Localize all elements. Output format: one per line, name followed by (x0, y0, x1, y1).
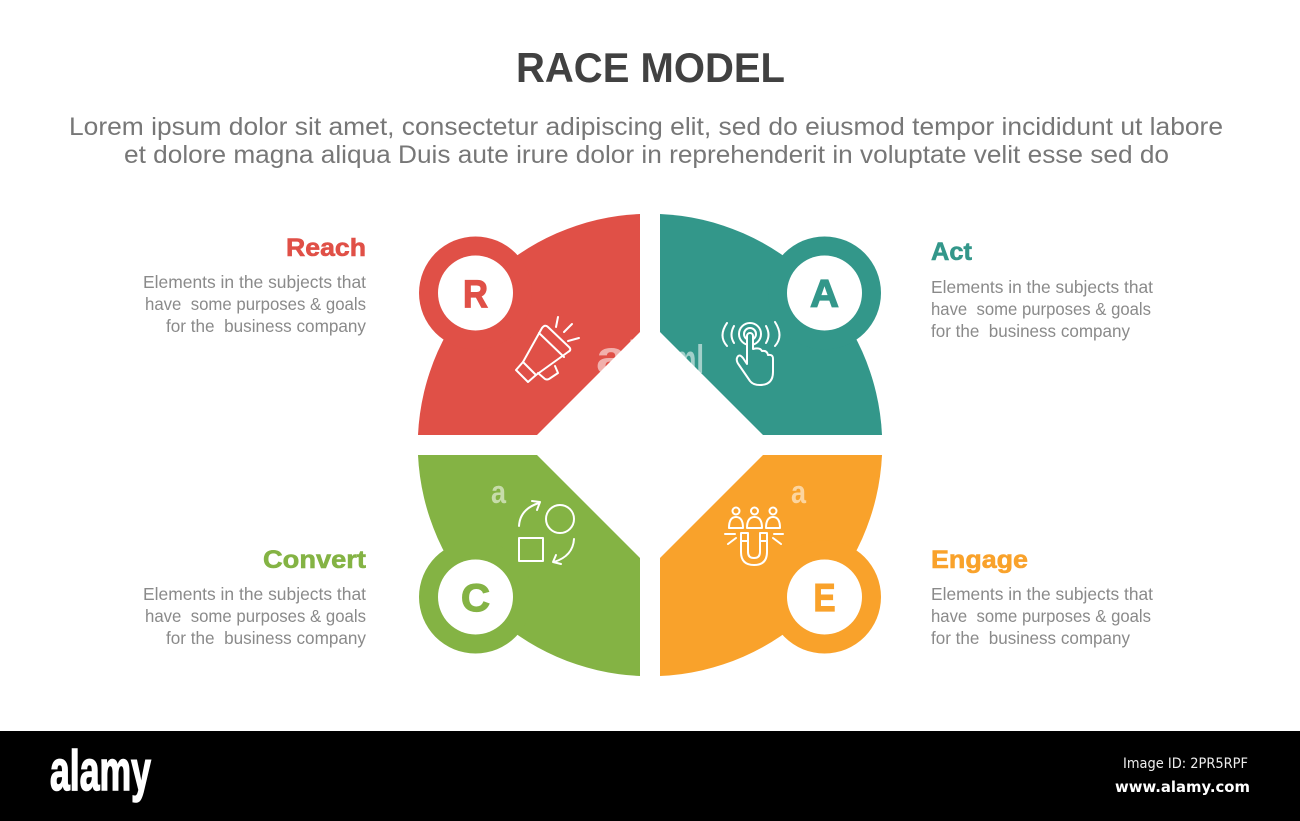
label: convert: have some purposes & goals (145, 606, 366, 626)
label: act: for the business company (931, 321, 1130, 341)
label: engage (931, 546, 1153, 648)
label: act: Elements in the subjects that (931, 277, 1153, 297)
panel: convert segment: C (461, 577, 490, 620)
label: engage: Elements in the subjects that (931, 584, 1153, 604)
label: act (931, 238, 1153, 341)
footer bar (0, 731, 1300, 821)
label: convert (143, 546, 367, 648)
label: convert: for the business company (166, 628, 366, 648)
label: act: Act (931, 238, 973, 266)
watermark fragments: al (596, 331, 642, 383)
panel: engage segment: E (814, 577, 836, 620)
panel: reach segment: R (463, 273, 488, 316)
icon: magnet attracting people (725, 508, 783, 565)
panel: reach segment (418, 214, 640, 435)
label: reach: for the business company (166, 316, 366, 336)
watermark fragments: a (491, 474, 506, 510)
label: convert: Convert (263, 546, 367, 574)
panel: act segment (660, 214, 882, 435)
icon: megaphone (516, 317, 579, 382)
label: reach (143, 234, 366, 336)
label: engage: Engage (931, 546, 1028, 574)
label: reach: have some purposes & goals (145, 294, 366, 314)
label: engage: for the business company (931, 628, 1130, 648)
subtitle text block: Lorem ipsum dolor sit amet, consectetur adipiscing elit, sed do eiusmod tempor incididunt ut labore (69, 113, 1223, 141)
panel: engage segment (660, 455, 882, 676)
label: act: have some purposes & goals (931, 299, 1151, 319)
subtitle text block (69, 113, 1223, 169)
label: engage: have some purposes & goals (931, 606, 1151, 626)
subtitle text block: et dolore magna aliqua Duis aute irure dolor in reprehenderit in voluptate velit esse sed do (124, 141, 1169, 169)
footer image id: Image ID: 2PR5RPF (1123, 756, 1248, 772)
title: RACE MODEL (516, 44, 785, 91)
panel: convert segment (418, 455, 640, 676)
watermark fragments: ml (672, 338, 704, 382)
label: convert: Elements in the subjects that (143, 584, 366, 604)
footer logo: alamy (50, 739, 151, 803)
footer url: www.alamy.com (1115, 778, 1250, 796)
watermark fragments: a (791, 474, 806, 510)
watermark fragments (491, 331, 806, 510)
label: reach: Reach (286, 234, 366, 262)
icon: tapping hand (722, 322, 780, 385)
icon: process cycle (519, 501, 574, 564)
panel: act segment: A (810, 273, 839, 316)
label: reach: Elements in the subjects that (143, 272, 366, 292)
